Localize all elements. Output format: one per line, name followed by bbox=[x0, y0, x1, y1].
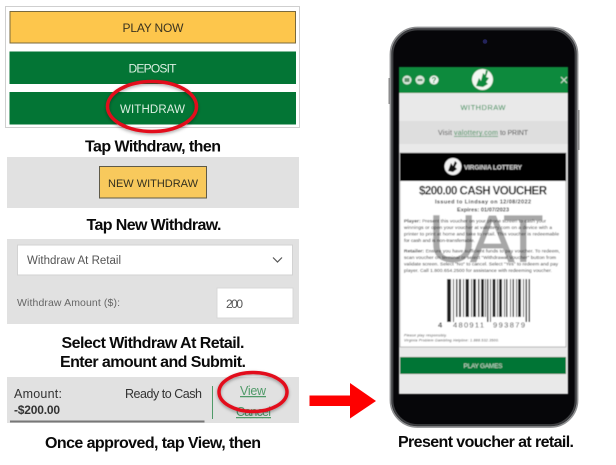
player instructions: printer to print at home and take to retail. This voucher is redeemable bbox=[404, 232, 559, 238]
logo bbox=[472, 69, 493, 90]
screen title: WITHDRAW bbox=[460, 103, 506, 112]
app header bbox=[399, 67, 568, 93]
voucher issue details: Expires: 01/07/2023 bbox=[457, 208, 509, 214]
voucher title: $200.00 CASH VOUCHER bbox=[419, 186, 548, 198]
player instructions: Player: Present this voucher on your phone screen to cash your bbox=[404, 218, 546, 224]
button: deposit bbox=[10, 52, 296, 84]
highlight circle: withdraw bbox=[108, 82, 196, 132]
voucher bbox=[400, 153, 566, 347]
responsible play note bbox=[404, 334, 499, 342]
barcode bbox=[438, 279, 530, 330]
retailer instructions: Retailer: Ensure you have sufficient funds to pay voucher. To redeem, bbox=[404, 248, 560, 254]
button: new withdraw bbox=[100, 166, 206, 198]
caption: once approved: Once approved, tap View, then bbox=[45, 435, 261, 452]
player instructions: for cash and is non-transferrable. bbox=[404, 238, 475, 244]
barcode: 480911 bbox=[453, 320, 484, 330]
panel: withdraw form bbox=[7, 239, 299, 324]
input: amount: 200 bbox=[226, 297, 243, 311]
voucher banner: VIRGINIA LOTTERY bbox=[464, 164, 523, 172]
camera bbox=[483, 39, 487, 44]
link: cancel: Cancel bbox=[236, 405, 271, 419]
text: amount bbox=[14, 387, 62, 417]
text: ready to cash: Ready to Cash bbox=[125, 387, 202, 401]
voucher issue details: Issued to Lindsay on 12/08/2022 bbox=[435, 200, 531, 206]
button: play now: PLAY NOW bbox=[122, 21, 184, 35]
dropdown: withdraw at retail: Withdraw At Retail bbox=[27, 255, 121, 267]
watermark: UAT bbox=[428, 201, 544, 277]
button: play now bbox=[10, 12, 296, 43]
text: amount: -$200.00 bbox=[14, 403, 60, 417]
barcode: 4 bbox=[438, 320, 443, 330]
caption: select withdraw at retail: Enter amount and Submit. bbox=[60, 354, 246, 371]
retailer instructions: player. Call 1.800.654.2500 for assistance with redeeming voucher. bbox=[404, 268, 552, 274]
responsible play note: Please play responsibly. bbox=[404, 334, 447, 338]
highlight circle: view bbox=[219, 372, 287, 412]
button: play games bbox=[400, 357, 566, 374]
close icon bbox=[561, 77, 567, 83]
button: withdraw: WITHDRAW bbox=[120, 104, 185, 116]
button: play games: PLAY GAMES bbox=[464, 363, 503, 370]
panel: account buttons bbox=[6, 6, 300, 132]
screen bbox=[399, 67, 568, 394]
print notice: valottery.com bbox=[454, 130, 498, 137]
panel: new withdraw bbox=[7, 157, 299, 208]
phone side buttons bbox=[388, 78, 580, 150]
button: new withdraw: NEW WITHDRAW bbox=[108, 178, 199, 190]
caption: present voucher: Present voucher at retail. bbox=[398, 434, 574, 451]
retailer instructions bbox=[404, 248, 560, 274]
phone body bbox=[390, 28, 578, 427]
retailer instructions: scan voucher on terminal or select "Withdrawal Voucher" button from bbox=[404, 255, 556, 261]
voucher banner bbox=[400, 153, 566, 181]
player instructions: winnings or open your voucher at valottery.com on a device with a bbox=[404, 225, 552, 231]
caption: select withdraw at retail bbox=[60, 335, 246, 371]
button: deposit: DEPOSIT bbox=[128, 62, 177, 76]
caption: select withdraw at retail: Select Withdraw At Retail. bbox=[62, 335, 244, 352]
text: amount: Amount: bbox=[14, 387, 62, 401]
label: withdraw amount: Withdraw Amount ($): bbox=[17, 297, 120, 309]
arrow bbox=[310, 383, 376, 418]
voucher issue details bbox=[435, 200, 531, 214]
player instructions bbox=[404, 218, 559, 244]
barcode: 993879 bbox=[493, 320, 525, 330]
responsible play note: Virginia Problem Gambling Helpline: 1.888.532.3500. bbox=[404, 338, 499, 342]
input: amount bbox=[217, 288, 293, 318]
panel: ready to cash row bbox=[7, 372, 299, 423]
print notice: Visit bbox=[438, 130, 452, 137]
retailer instructions: validate screen. Select "No" to cancel. Select "Yes" to redeem and pay bbox=[404, 262, 559, 268]
link: view: View bbox=[240, 384, 267, 398]
caption: tap new withdraw: Tap New Withdraw. bbox=[86, 217, 222, 234]
print notice: to PRINT bbox=[500, 130, 529, 137]
print notice bbox=[399, 121, 568, 144]
dropdown: withdraw at retail bbox=[18, 245, 292, 275]
button: withdraw bbox=[10, 92, 296, 124]
app header: ? bbox=[432, 76, 437, 85]
caption: tap withdraw: Tap Withdraw, then bbox=[85, 138, 221, 156]
phone bbox=[388, 28, 580, 427]
